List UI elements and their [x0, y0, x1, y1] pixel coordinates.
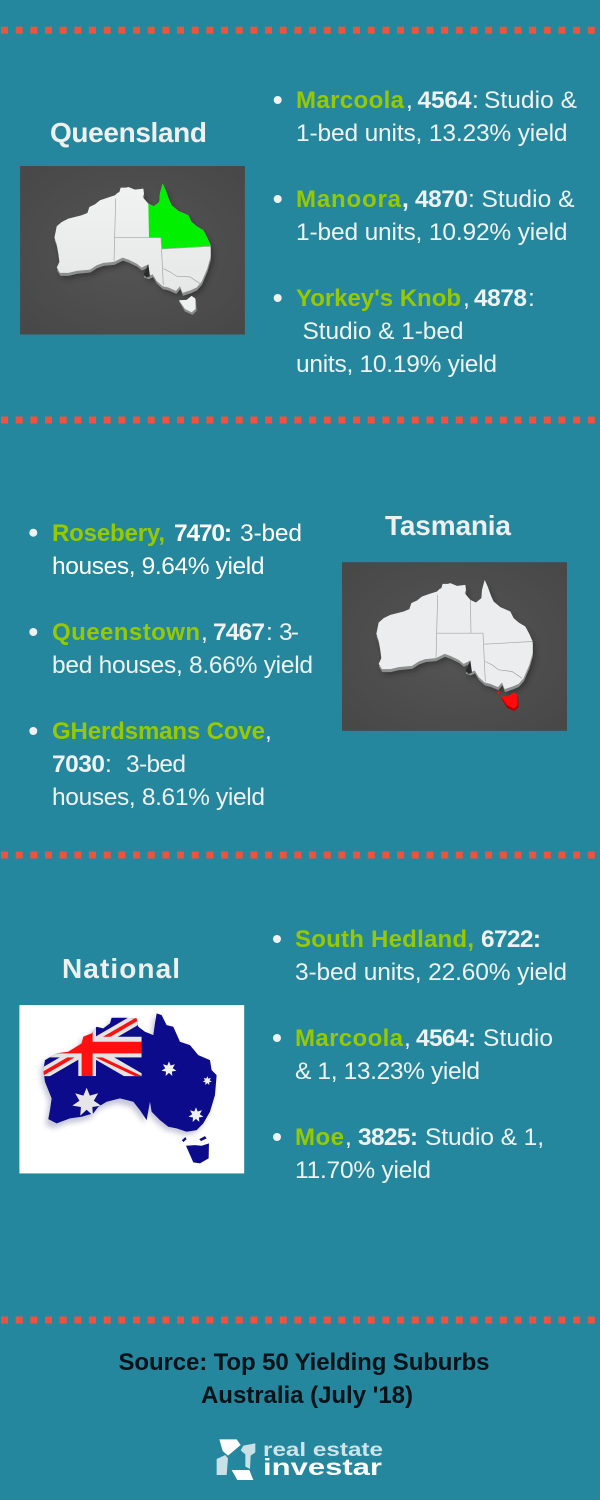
icon: house mark [217, 1439, 255, 1480]
bullet: Manoora: Manoora [296, 186, 402, 213]
bullet: Moe: Studio & 1, [425, 1124, 544, 1151]
bullet: Manoora: 4870 [415, 186, 468, 213]
bullet: Moe: 11.70% yield [295, 1157, 431, 1184]
source note [118, 1349, 490, 1409]
map: Australian flag over continent [19, 1005, 244, 1174]
bullet list: Queensland suburbs [274, 87, 577, 378]
bullet: Marcoola: 4564: [416, 1025, 476, 1052]
bullet: GHerdsmans Cove: 3-bed [126, 751, 186, 778]
bullet: Manoora: Studio & [482, 186, 574, 213]
bullet: Yorkey's Knob [274, 285, 535, 378]
dotted divider 4 [1, 1316, 600, 1324]
bullet: Marcoola: & 1, 13.23% yield [295, 1058, 480, 1085]
bullet: Marcoola: , [406, 87, 413, 114]
bullet: Marcoola [273, 1025, 553, 1085]
bullet: Rosebery: 3-bed [240, 520, 302, 547]
bullet: South Hedland: 3-bed units, 22.60% yield [295, 959, 567, 986]
bullet: Queenstown: 3- [279, 619, 299, 646]
bullet: Manoora: : [468, 186, 475, 213]
bullet list: National suburbs [273, 926, 567, 1184]
bullet: Queenstown [29, 619, 313, 679]
bullet: Queenstown: Queenstown [52, 619, 200, 646]
bullet: Yorkey's Knob: , [463, 285, 470, 312]
source note: Source: Top 50 Yielding Suburbs [118, 1349, 490, 1376]
bullet: GHerdsmans Cove: 7030 [52, 751, 105, 778]
bullet: Marcoola: 1-bed units, 13.23% yield [296, 120, 568, 147]
heading: Queensland: Queensland [50, 117, 207, 148]
bullet: Rosebery: houses, 9.64% yield [52, 553, 264, 580]
map: Tasmania highlighted [342, 562, 567, 731]
bullet: Queenstown: 7467 [213, 619, 265, 646]
wordmark: investar [263, 1454, 382, 1480]
bullet: Queenstown: , [201, 619, 208, 646]
bullet: GHerdsmans Cove: : [105, 751, 112, 778]
bullet: Marcoola: , [404, 1025, 411, 1052]
map: Queensland highlighted [20, 166, 245, 334]
bullet: Queenstown: bed houses, 8.66% yield [52, 652, 313, 679]
bullet: Marcoola: 4564 [418, 87, 472, 114]
bullet: Queenstown: : [266, 619, 273, 646]
bullet: Rosebery: 7470: [174, 520, 232, 547]
bullet: Moe: , [345, 1124, 352, 1151]
bullet: Manoora [274, 186, 574, 246]
source note: Australia (July '18) [201, 1382, 413, 1409]
bullet: GHerdsmans Cove [29, 718, 272, 811]
panel: National [19, 926, 567, 1184]
wordmark: real estate [263, 1440, 383, 1461]
bullet: Yorkey's Knob: Studio & 1-bed [302, 318, 464, 345]
bullet: Moe [273, 1124, 544, 1184]
bullet: South Hedland: 6722: [481, 926, 541, 953]
bullet: GHerdsmans Cove: houses, 8.61% yield [52, 784, 265, 811]
panel: Tasmania [29, 510, 567, 811]
bullet: Marcoola: Marcoola [296, 87, 405, 114]
bullet: South Hedland [273, 926, 567, 986]
bullet: Marcoola: Studio [483, 1025, 553, 1052]
bullet: Manoora: , [402, 186, 409, 213]
bullet: Marcoola: Marcoola [295, 1025, 404, 1052]
bullet: Manoora: 1-bed units, 10.92% yield [296, 219, 568, 246]
bullet: Moe: 3825: [358, 1124, 418, 1151]
bullet: GHerdsmans Cove: GHerdsmans Cove [52, 718, 265, 745]
heading: Tasmania: Tasmania [385, 510, 511, 541]
dotted divider 1 [1, 27, 600, 34]
bullet: Marcoola [274, 87, 577, 147]
bullet: Yorkey's Knob: units, 10.19% yield [296, 351, 497, 378]
bullet: South Hedland: South Hedland, [295, 926, 474, 953]
bullet: Yorkey's Knob: 4878 [474, 285, 527, 312]
dotted divider 2 [1, 416, 600, 424]
bullet: Marcoola: : [472, 87, 479, 114]
bullet: Marcoola: Studio & [484, 87, 577, 114]
logo: Real Estate Investar [217, 1439, 383, 1480]
dotted divider 3 [1, 852, 600, 858]
wordmark [263, 1440, 383, 1480]
panel: Queensland [20, 87, 577, 378]
bullet: Moe: Moe [295, 1124, 344, 1151]
bullet: GHerdsmans Cove: , [265, 718, 272, 745]
bullet: Rosebery [29, 520, 302, 580]
bullet: Rosebery: Rosebery, [52, 520, 165, 547]
bullet: Yorkey's Knob: : [528, 285, 535, 312]
heading: National: National [62, 953, 180, 984]
bullet: Yorkey's Knob: Yorkey's Knob [296, 285, 461, 312]
bullet list: Tasmania suburbs [29, 520, 313, 811]
